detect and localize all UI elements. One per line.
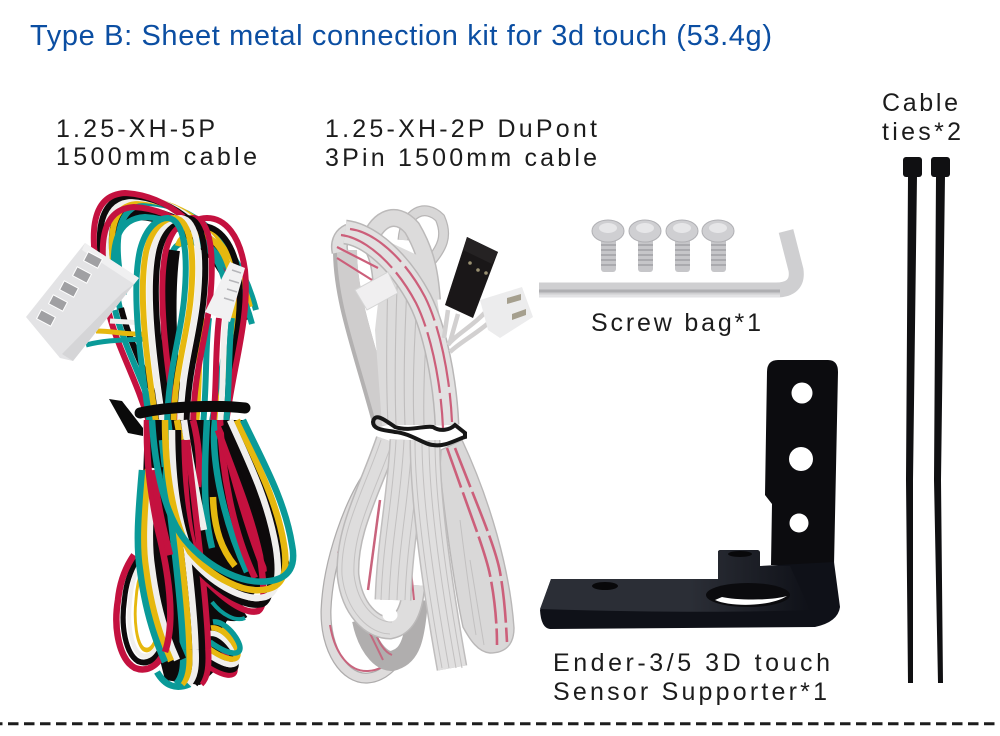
central ribbon strip [415, 440, 462, 668]
DuPont wires [444, 307, 494, 352]
DuPont pins [468, 261, 488, 275]
white hole in ribbon bundle [382, 608, 398, 622]
label: screw bag: Screw bag*1 [591, 309, 761, 337]
rear thin loop [326, 470, 412, 678]
small white ribbon connector [355, 272, 398, 310]
connector wires to tie [86, 308, 163, 425]
dark backing of lower coil [140, 420, 290, 685]
left cable tie [903, 157, 922, 683]
center hanging strands [157, 440, 208, 687]
label: 5P cable: 1.25-XH-5P [56, 115, 215, 143]
right red loop [172, 218, 246, 449]
screws [592, 220, 734, 272]
metal bracket [540, 360, 840, 629]
hex key [539, 231, 796, 296]
red-striped front ribbon [341, 229, 452, 428]
front teal loop [136, 218, 212, 425]
title: Type B: Sheet metal connection kit for 3d touch (53.4g) [30, 20, 772, 52]
upper ribbon body [375, 240, 455, 425]
bracket through-holes [789, 382, 813, 532]
black DuPont connector [445, 237, 498, 318]
label: DuPont cable length: 3Pin 1500mm cable [325, 144, 597, 172]
left hanging loop [116, 555, 165, 669]
base top face [540, 550, 810, 612]
long right loop [152, 420, 293, 612]
base plate front edge [540, 550, 840, 629]
label: bracket line one: Ender-3/5 3D touch [553, 649, 830, 677]
label: cable ties line two: ties*2 [882, 118, 961, 146]
wire tie on colored cable [109, 399, 245, 436]
right cable tie [931, 157, 950, 683]
label: 5P cable length: 1500mm cable [56, 143, 257, 171]
left diagonal strands [138, 420, 183, 662]
screw 2 [629, 220, 661, 272]
connector pins [37, 252, 102, 326]
middle ribbon band [381, 440, 420, 600]
label: DuPont cable: 1.25-XH-2P DuPont [325, 115, 597, 143]
gray shadow knot [362, 600, 418, 661]
folded end with red stripes [337, 231, 381, 292]
colored five-wire cable [26, 193, 293, 687]
cable ties [903, 157, 950, 683]
large white 5-pin connector [26, 243, 139, 361]
small white connector [205, 262, 245, 322]
base holes [592, 551, 790, 607]
small bottom loop [205, 595, 245, 675]
screw 3 [666, 220, 698, 272]
screw 1 [592, 220, 624, 272]
upper ribbon loops [345, 211, 455, 425]
left ribbon coil [342, 440, 414, 634]
black filler inside front loop [169, 250, 175, 410]
dashed divider [0, 722, 1000, 725]
right ribbon loop [440, 440, 514, 653]
screw 4 [702, 220, 734, 272]
back arch of wires [94, 193, 256, 324]
white 2-pin connector [480, 287, 533, 338]
wires inside right coil [168, 420, 265, 578]
gray ribbon cable [326, 211, 533, 678]
vertical plate [765, 360, 838, 565]
ribbon cable tie [373, 417, 465, 445]
label: cable ties line one: Cable [882, 89, 958, 117]
label: bracket line two: Sensor Supporter*1 [553, 678, 827, 706]
